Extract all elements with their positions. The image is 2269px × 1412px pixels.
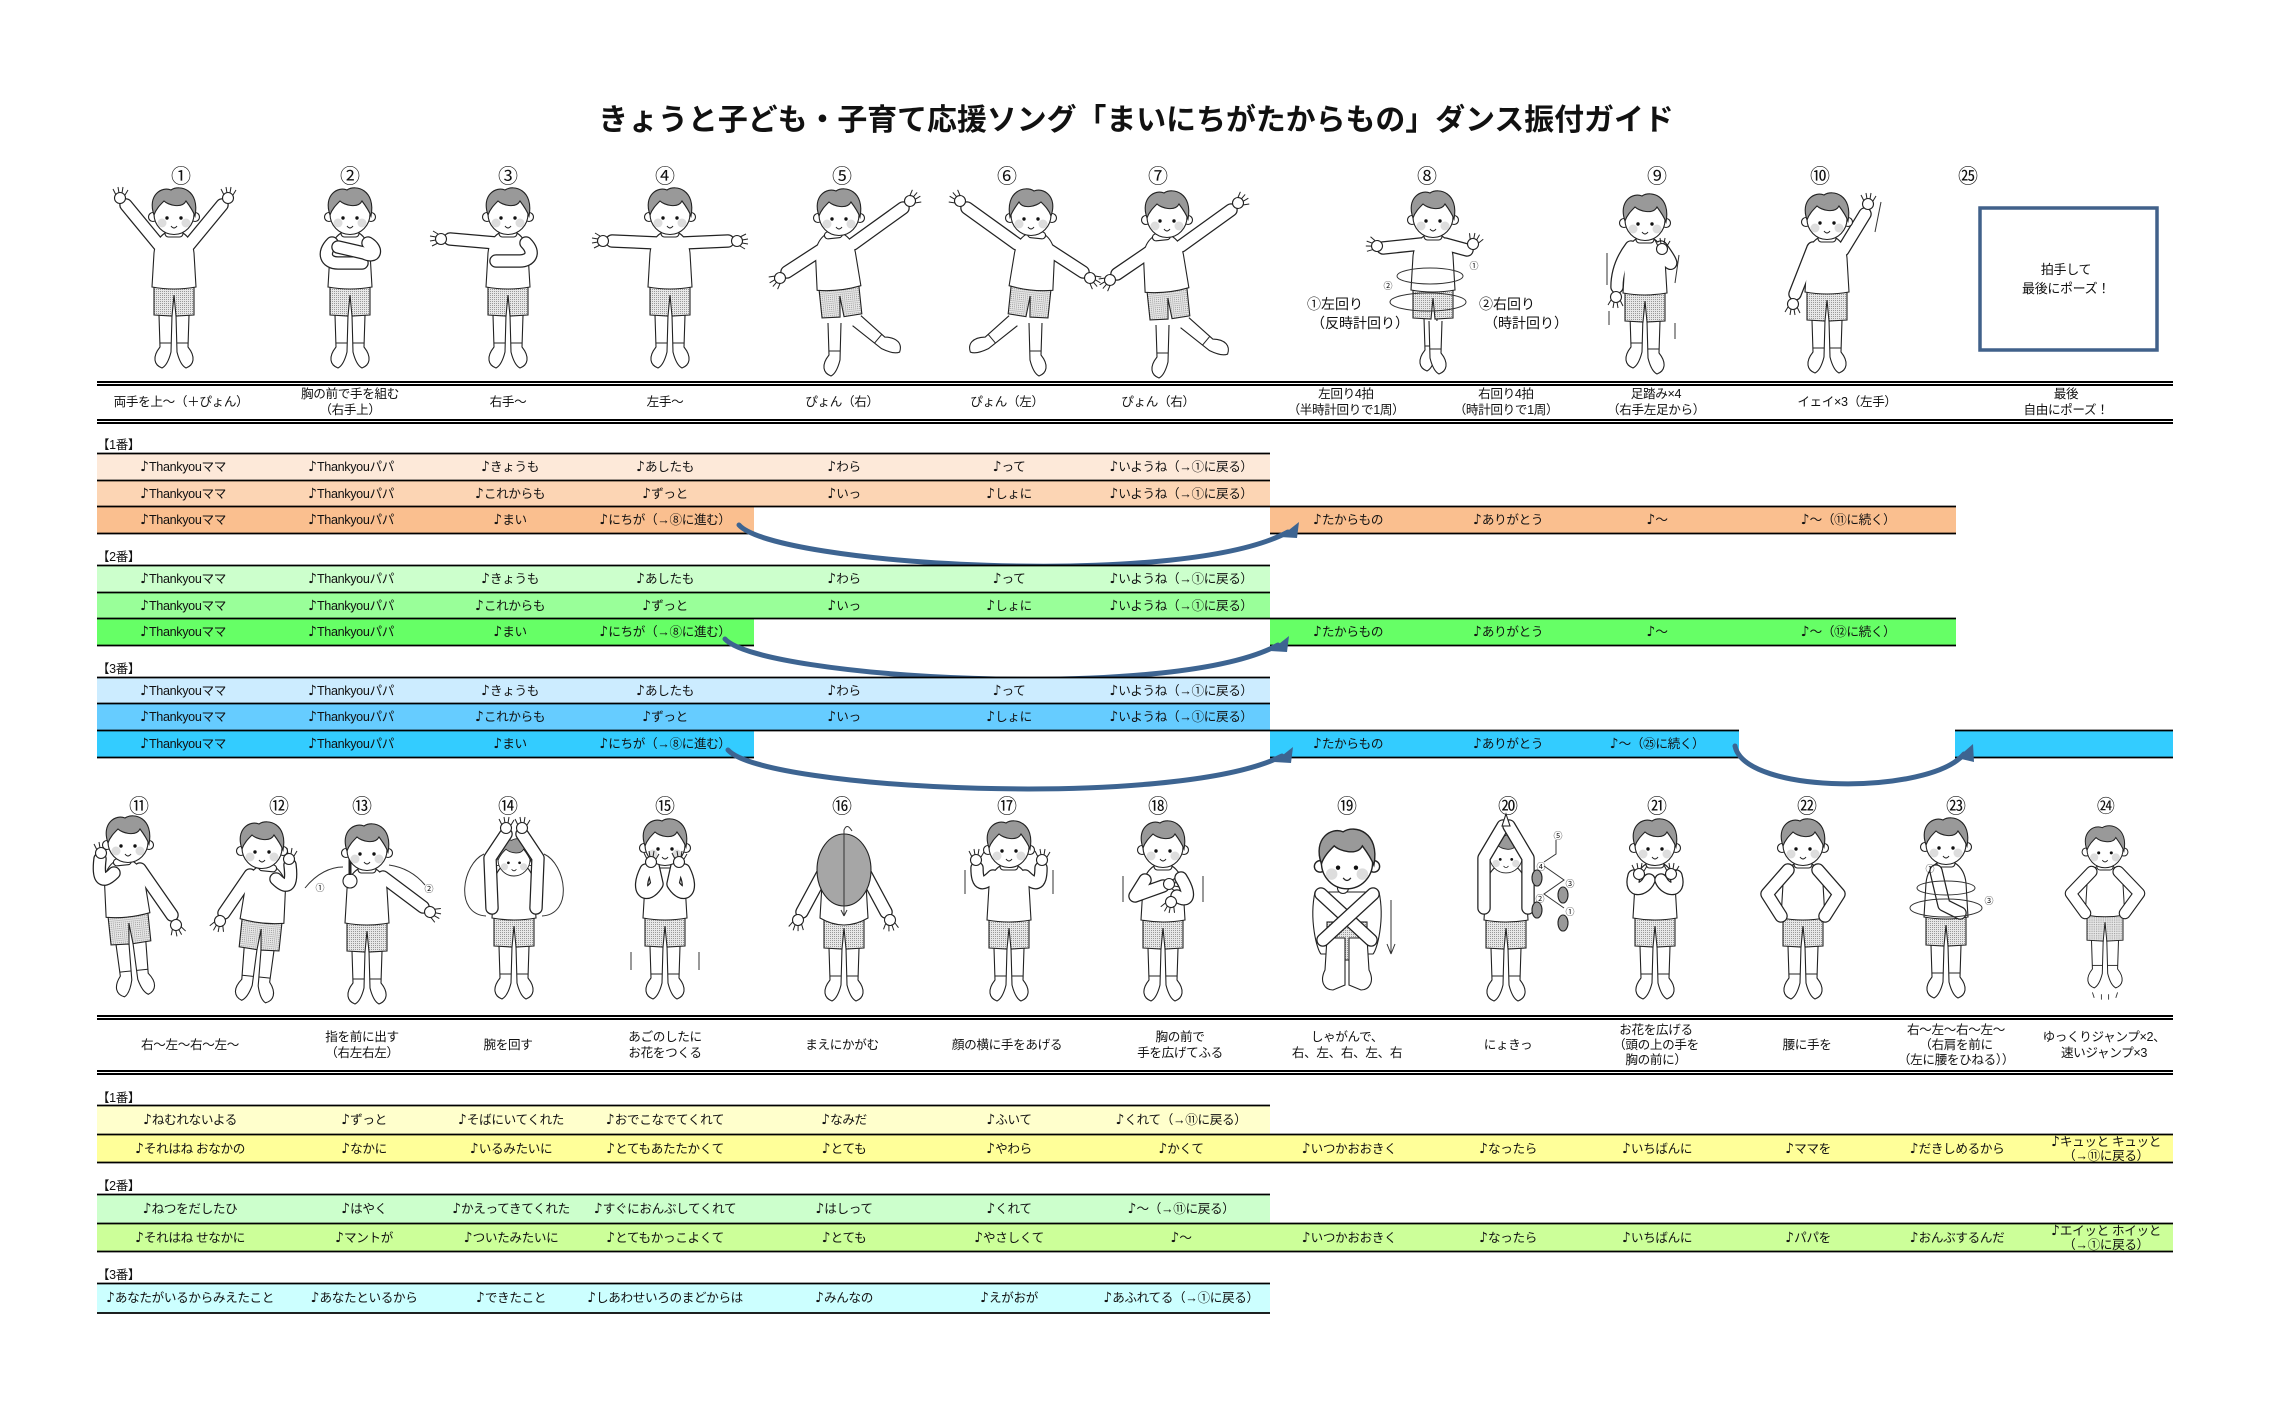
verse 2 row 3: ♪たからもの (1313, 624, 1383, 640)
verse 3 row 3: ♪Thankyouママ (140, 736, 226, 752)
figure 22: hands on hips (1767, 795, 1839, 999)
turning direction notes: ①左回り (1307, 296, 1363, 312)
verse 1 row 1: ♪って (993, 459, 1025, 475)
figure 8: turning with rotation rings: ⑧ (1417, 165, 1437, 188)
lower verse 2 row 1: ♪くれて (986, 1201, 1032, 1217)
verse 2 row 1 (97, 565, 1270, 592)
figure 2: arms folded: ② (340, 165, 360, 188)
number 6: ⑥ (997, 165, 1017, 188)
verse 3 row 1 (97, 677, 1270, 703)
verse 3 row 1: ♪いようね（→①に戻る） (1109, 683, 1253, 699)
lower verse 2 row 1: ♪はやく (341, 1201, 387, 1217)
verse 2 row 2 (97, 592, 1270, 618)
title: きょうと子ども・子育て応援ソング「まいにちがたからもの」ダンス振付ガイド (598, 103, 1674, 137)
move captions bottom: （右肩を前に (1919, 1037, 1993, 1052)
figure 20: hands extending overhead: ⑤ (1553, 831, 1563, 841)
lower verse 1 row 2: ♪いるみたいに (470, 1141, 552, 1157)
verse 3 row 3: ♪にちが（→⑧に進む） (599, 736, 731, 752)
verse 3 row 3 (97, 730, 2173, 758)
move captions bottom: お花をつくる (628, 1045, 702, 1060)
arrow verse 1 (739, 522, 1299, 566)
figure 20: hands extending overhead: ② (1535, 894, 1545, 904)
lower verse 2 row 1: ♪ねつをだしたひ (143, 1201, 237, 1217)
move captions top: ぴょん（右） (1121, 395, 1195, 409)
lower verse 2 label: 【2番】 (97, 1179, 140, 1193)
figure 24: jumping, hands on hips: ㉔ (2097, 796, 2115, 816)
number 25: ㉕ (1958, 165, 1978, 188)
move captions bottom: ゆっくりジャンプ×2、 (2043, 1030, 2165, 1044)
figure 7: hop right: ⑦ (1148, 165, 1168, 188)
lower verse 2 row 2: ♪それはね せなかに (135, 1230, 245, 1246)
lower verse 3 row (97, 1283, 1270, 1313)
arrow verse 3 to pose (1735, 744, 1974, 784)
lower verse 3 row: ♪みんなの (815, 1290, 873, 1306)
move captions top: イェイ×3（左手） (1797, 395, 1897, 409)
verse 2 row 1: ♪きょうも (481, 571, 539, 587)
move captions top: 自由にポーズ！ (2023, 402, 2109, 417)
lower verse 1 row 2: ♪かくて (1158, 1141, 1204, 1157)
verse 3 row 3: ♪Thankyouパパ (308, 736, 395, 752)
lower verse 2 row 1: ♪かえってきてくれた (452, 1201, 570, 1217)
lower verse 1 label: 【1番】 (97, 1091, 140, 1105)
move captions bottom: しゃがんで、 (1311, 1030, 1383, 1044)
verse 1 row 2: ♪いっ (827, 486, 861, 502)
figure 24: jumping, hands on hips (2071, 796, 2139, 1000)
figure 1: both hands up (113, 165, 236, 368)
verse 1 row 1: ♪Thankyouママ (140, 459, 226, 475)
figure 13: pointing finger: ① (315, 883, 325, 893)
lower verse 1 row 2: ♪いちばんに (1622, 1141, 1692, 1157)
verse 1 row 3: ♪Thankyouパパ (308, 512, 395, 528)
move captions bottom: 顔の横に手をあげる (952, 1038, 1062, 1052)
verse 3 row 2: ♪ずっと (642, 709, 688, 725)
verse 3 row 1: ♪わら (827, 683, 861, 699)
verse 1 row 3: ♪たからもの (1313, 512, 1383, 528)
lower verse 1 row 2: ♪とてもあたたかくて (606, 1141, 724, 1157)
figure 5: hop right: ⑤ (832, 165, 852, 188)
verse 2 row 3: ♪ありがとう (1473, 624, 1543, 640)
figure 13: pointing finger: ② (424, 884, 434, 894)
verse 2 row 2: ♪しょに (986, 598, 1032, 614)
verse 3 row 1: ♪あしたも (636, 683, 694, 699)
figure 23: twisting waist with rings: ① (1925, 864, 1935, 874)
verse 2 row 3: ♪まい (493, 624, 527, 640)
verse 3 row 2: ♪Thankyouパパ (308, 709, 395, 725)
arrow verse 3 (728, 747, 1293, 789)
move captions bottom: 腕を回す (484, 1038, 532, 1052)
verse 2 row 3: ♪～（⑫に続く） (1801, 624, 1895, 640)
lower verse 2 row 2: ♪おんぶするんだ (1910, 1230, 2004, 1246)
figure 3: right hand out: ③ (498, 165, 518, 188)
lower verse 3 row: ♪あなたといるから (311, 1290, 417, 1306)
lower verse 1 row 2: ♪だきしめるから (1910, 1141, 2004, 1157)
lower verse 2 row 1: ♪はしって (815, 1201, 873, 1217)
figure 20: hands extending overhead (1484, 795, 1575, 1001)
move captions top: 足踏み×4 (1631, 387, 1682, 401)
move captions bottom: 右～左～右～左～ (1907, 1023, 2006, 1037)
verse 2 row 2: ♪いっ (827, 598, 861, 614)
lower verse 2 row 2: ♪いちばんに (1622, 1230, 1692, 1246)
lower verse 2 row 2: ♪～ (1170, 1230, 1192, 1246)
turning direction notes: （反時計回り） (1311, 315, 1409, 331)
figure 10: yay with left hand (1785, 165, 1881, 373)
lower verse 3 row: ♪あふれてる（→①に戻る） (1103, 1290, 1259, 1306)
lower verse 2 row 2: ♪なったら (1479, 1230, 1537, 1246)
figure 9: marching: ⑨ (1647, 165, 1667, 188)
move captions top: （半時計回りで1周） (1288, 402, 1404, 417)
verse 2 row 3 (97, 618, 1956, 646)
figure 9: marching (1607, 165, 1679, 374)
figure 20: hands extending overhead: ③ (1565, 879, 1575, 889)
figure 5: hop right (766, 165, 924, 376)
move captions bottom: 指を前に出す (325, 1029, 399, 1044)
verse 3 row 2: ♪いっ (827, 709, 861, 725)
move captions bottom: お花を広げる (1619, 1022, 1693, 1037)
verse 1 row 2: ♪Thankyouママ (140, 486, 226, 502)
lower verse 2 row 2: ♪ついたみたいに (464, 1230, 558, 1246)
move captions top: 胸の前で手を組む (301, 386, 399, 401)
move captions top: ぴょん（左） (970, 395, 1044, 409)
verse 3 row 1: ♪きょうも (481, 683, 539, 699)
figure 13: pointing finger (305, 795, 443, 1004)
lower verse 2 row 1: ♪～（→⑪に戻る） (1128, 1201, 1234, 1217)
figure 14: rolling arms overhead (465, 795, 563, 999)
verse 2 row 3: ♪Thankyouママ (140, 624, 226, 640)
move captions bottom: 腰に手を (1783, 1038, 1831, 1052)
lower verse 1 row 1: ♪ふいて (986, 1112, 1032, 1128)
figure 15: flower under chin: ⑮ (655, 795, 675, 818)
figure 16: bending forward, back view: ⑯ (832, 795, 852, 818)
verse 3 row 3: ♪まい (493, 736, 527, 752)
lower verse 1 row 1: ♪そばにいてくれた (458, 1112, 564, 1128)
verse 1 row 3: ♪Thankyouママ (140, 512, 226, 528)
verse 3 row 2: ♪これからも (475, 709, 545, 725)
verse 2 row 1: ♪いようね（→①に戻る） (1109, 571, 1253, 587)
figure 19: squatting with crossed arms (1313, 795, 1395, 990)
lower verse 3 row: ♪えがおが (980, 1290, 1039, 1306)
move captions top: 最後 (2054, 387, 2079, 401)
figure 11: hand at ear, right: ⑪ (129, 795, 149, 818)
move captions bottom: 右、左、右、左、右 (1292, 1046, 1402, 1060)
lower verse 1 row 1: ♪ずっと (341, 1112, 387, 1128)
verse 3 row 2 (97, 703, 1270, 730)
figure 17: hands beside face: ⑰ (997, 795, 1017, 818)
verse 3 row 2: ♪しょに (986, 709, 1032, 725)
verse 2 row 1: ♪Thankyouパパ (308, 571, 395, 587)
lower verse 1 row 2: ♪なったら (1479, 1141, 1537, 1157)
verse 1 row 3: ♪～（⑪に続く） (1801, 512, 1895, 528)
lower verse 3 row: ♪しあわせいろのまどからは (587, 1290, 743, 1306)
move captions top: （右手左足から） (1607, 403, 1705, 417)
lower verse 3 label: 【3番】 (97, 1268, 140, 1282)
verse 1 row 1: ♪Thankyouパパ (308, 459, 395, 475)
lower verse 2 row 2: ♪マントが (335, 1230, 394, 1246)
figure 17: hands beside face (965, 795, 1053, 1001)
move captions bottom: まえにかがむ (805, 1038, 879, 1052)
move captions top: （時計回りで1周） (1454, 402, 1558, 417)
verse 1 row 2: ♪いようね（→①に戻る） (1109, 486, 1253, 502)
figure 16: bending forward, back view (788, 795, 899, 1001)
verse 1 row 2 (97, 480, 1270, 506)
figure 20: hands extending overhead: ④ (1536, 862, 1546, 872)
figure 4: both arms out: ④ (655, 165, 675, 188)
figure 14: rolling arms overhead: ⑭ (498, 795, 518, 818)
verse 3 row 2: ♪Thankyouママ (140, 709, 226, 725)
verse 2 row 1: ♪って (993, 571, 1025, 587)
figure 1: both hands up: ① (171, 165, 191, 188)
turning direction notes: ②右回り (1479, 296, 1535, 312)
figure 19: squatting with crossed arms: ⑲ (1337, 795, 1357, 818)
figure 11: hand at ear, right (94, 795, 186, 998)
move captions bottom: 胸の前で (1156, 1029, 1204, 1044)
lower verse 2 row 2: （→①に戻る） (2063, 1238, 2149, 1252)
lower verse 2 row 2: ♪エイッと ホイッと (2051, 1223, 2161, 1239)
verse 3 row 3: ♪たからもの (1313, 736, 1383, 752)
move captions bottom: 右～左～右～左～ (141, 1038, 240, 1052)
lower verse 2 row 2 (97, 1223, 2173, 1252)
verse 3 row 1: ♪Thankyouママ (140, 683, 226, 699)
verse 1 row 3 (97, 506, 1956, 534)
verse 2 row 2: ♪これからも (475, 598, 545, 614)
lower verse 1 row 2: ♪いつかおおきく (1302, 1141, 1396, 1157)
move captions top: 右回り4拍 (1478, 387, 1534, 401)
lower verse 1 row 1: ♪おでこなでてくれて (606, 1112, 724, 1128)
figure 22: hands on hips: ㉒ (1797, 795, 1817, 818)
verse 1 row 2: ♪しょに (986, 486, 1032, 502)
verse 2 row 2: ♪ずっと (642, 598, 688, 614)
figure 6: hop left (946, 189, 1104, 376)
verse 2 row 3: ♪～ (1646, 624, 1668, 640)
figure 15: flower under chin (631, 795, 699, 999)
box: final pose (1980, 208, 2157, 350)
lower verse 1 row 2: ♪やわら (986, 1141, 1032, 1157)
lower verse 1 row 1: ♪なみだ (821, 1112, 867, 1128)
figure 12: hand at ear, left (209, 795, 297, 1004)
move captions top: 両手を上～（＋ぴょん） (114, 395, 248, 409)
lower verse 2 row 2: ♪パパを (1785, 1230, 1831, 1246)
move captions top: 右手～ (490, 395, 527, 409)
figure 23: twisting waist with rings (1910, 795, 1994, 998)
verse 2 row 1: ♪あしたも (636, 571, 694, 587)
lower verse 2 row 1 (97, 1194, 1270, 1223)
figure 2: arms folded (324, 165, 376, 368)
move captions bottom: 手を広げてふる (1137, 1046, 1223, 1060)
figure 23: twisting waist with rings: ③ (1984, 896, 1994, 906)
verse 2 row 2: ♪Thankyouママ (140, 598, 226, 614)
lower verse 1 row 2: ♪とても (822, 1141, 866, 1157)
verse 3 row 2: ♪いようね（→①に戻る） (1109, 709, 1253, 725)
figure 8: turning with rotation rings: ① (1469, 261, 1479, 271)
verse 1 row 1: ♪いようね（→①に戻る） (1109, 459, 1253, 475)
lower verse 1 row 2: ♪なかに (341, 1141, 387, 1157)
verse 1 row 1: ♪きょうも (481, 459, 539, 475)
lower verse 2 row 2: ♪とてもかっこよくて (606, 1230, 724, 1246)
verse 3 label: 【3番】 (97, 662, 140, 676)
lower verse 1 row 2: （→⑪に戻る） (2063, 1149, 2149, 1163)
lower verse 2 row 2: ♪いつかおおきく (1302, 1230, 1396, 1246)
figure 21: open flower in front of chest: ㉑ (1647, 795, 1667, 818)
figure 12: hand at ear, left: ⑫ (269, 795, 289, 818)
verse 1 row 1 (97, 453, 1270, 480)
lower verse 2 row 2: ♪やさしくて (974, 1230, 1044, 1246)
turning direction notes: （時計回り） (1484, 315, 1568, 331)
move captions bottom: （左に腰をひねる）） (1898, 1053, 2014, 1067)
lower verse 1 row 2: ♪キュッと キュッと (2051, 1134, 2161, 1150)
figure 7: hop right (1096, 165, 1252, 378)
figure 21: open flower in front of chest (1630, 795, 1680, 999)
move captions bottom: （頭の上の手を (1613, 1038, 1699, 1052)
verse 1 row 3: ♪～ (1646, 512, 1668, 528)
verse 2 row 1: ♪わら (827, 571, 861, 587)
turning direction notes (1307, 296, 1568, 331)
verse 1 row 1: ♪わら (827, 459, 861, 475)
verse 3 row 1: ♪Thankyouパパ (308, 683, 395, 699)
verse 2 row 1: ♪Thankyouママ (140, 571, 226, 587)
verse 1 row 1: ♪あしたも (636, 459, 694, 475)
figure 4: both arms out (592, 165, 748, 368)
move captions bottom (97, 1016, 2173, 1074)
move captions bottom: あごのしたに (628, 1029, 702, 1044)
move captions top: 左回り4拍 (1318, 387, 1374, 401)
verse 2 label: 【2番】 (97, 550, 140, 564)
move captions top: ぴょん（右） (805, 395, 879, 409)
figure 23: twisting waist with rings: ㉓ (1946, 795, 1966, 818)
verse 2 row 3: ♪にちが（→⑧に進む） (599, 624, 731, 640)
lower verse 1 row 2 (97, 1134, 2173, 1163)
lower verse 3 row: ♪あなたがいるからみえたこと (106, 1290, 274, 1306)
lower verse 2 row 1: ♪すぐにおんぶしてくれて (594, 1201, 736, 1217)
box: final pose: 最後にポーズ！ (2022, 281, 2110, 296)
move captions top: （右手上） (319, 403, 381, 417)
figure 20: hands extending overhead: ⑳ (1498, 795, 1518, 818)
verse 1 row 2: ♪ずっと (642, 486, 688, 502)
lower verse 1 row 2: ♪ママを (1785, 1141, 1831, 1157)
verse 3 row 1: ♪って (993, 683, 1025, 699)
lower verse 1 row 1 (97, 1105, 1270, 1134)
verse 1 row 2: ♪Thankyouパパ (308, 486, 395, 502)
figure 10: yay with left hand: ⑩ (1810, 165, 1830, 188)
figure 8: turning with rotation rings (1365, 165, 1484, 374)
lower verse 3 row: ♪できたこと (476, 1290, 546, 1306)
verse 1 row 3: ♪ありがとう (1473, 512, 1543, 528)
figure 3: right hand out (430, 165, 534, 368)
arrow verse 2 (725, 636, 1289, 679)
figure 8: turning with rotation rings: ② (1383, 281, 1393, 291)
verse 1 label: 【1番】 (97, 438, 140, 452)
lower verse 1 row 1: ♪くれて（→⑪に戻る） (1116, 1112, 1246, 1128)
figure 18: hands waving in front of chest: ⑱ (1148, 795, 1168, 818)
figure 18: hands waving in front of chest (1123, 795, 1203, 1001)
move captions bottom: 胸の前に） (1625, 1052, 1687, 1067)
verse 2 row 2: ♪いようね（→①に戻る） (1109, 598, 1253, 614)
verse 1 row 2: ♪これからも (475, 486, 545, 502)
verse 1 row 3: ♪まい (493, 512, 527, 528)
move captions bottom: 速いジャンプ×3 (2061, 1046, 2147, 1060)
figure 20: hands extending overhead: ① (1565, 907, 1575, 917)
verse 3 row 3: ♪ありがとう (1473, 736, 1543, 752)
move captions top: 左手～ (647, 395, 684, 409)
verse 2 row 2: ♪Thankyouパパ (308, 598, 395, 614)
box: final pose: 拍手して (2041, 262, 2091, 277)
move captions top (97, 382, 2173, 423)
move captions bottom: にょきっ (1484, 1038, 1532, 1052)
verse 1 row 3: ♪にちが（→⑧に進む） (599, 512, 731, 528)
lower verse 2 row 2: ♪とても (822, 1230, 866, 1246)
lower verse 1 row 1: ♪ねむれないよる (143, 1112, 237, 1128)
verse 2 row 3: ♪Thankyouパパ (308, 624, 395, 640)
figure 13: pointing finger: ⑬ (352, 795, 372, 818)
move captions bottom: （右左右左） (325, 1046, 399, 1060)
verse 3 row 3: ♪～（㉕に続く） (1610, 736, 1704, 752)
lower verse 1 row 2: ♪それはね おなかの (135, 1141, 245, 1157)
